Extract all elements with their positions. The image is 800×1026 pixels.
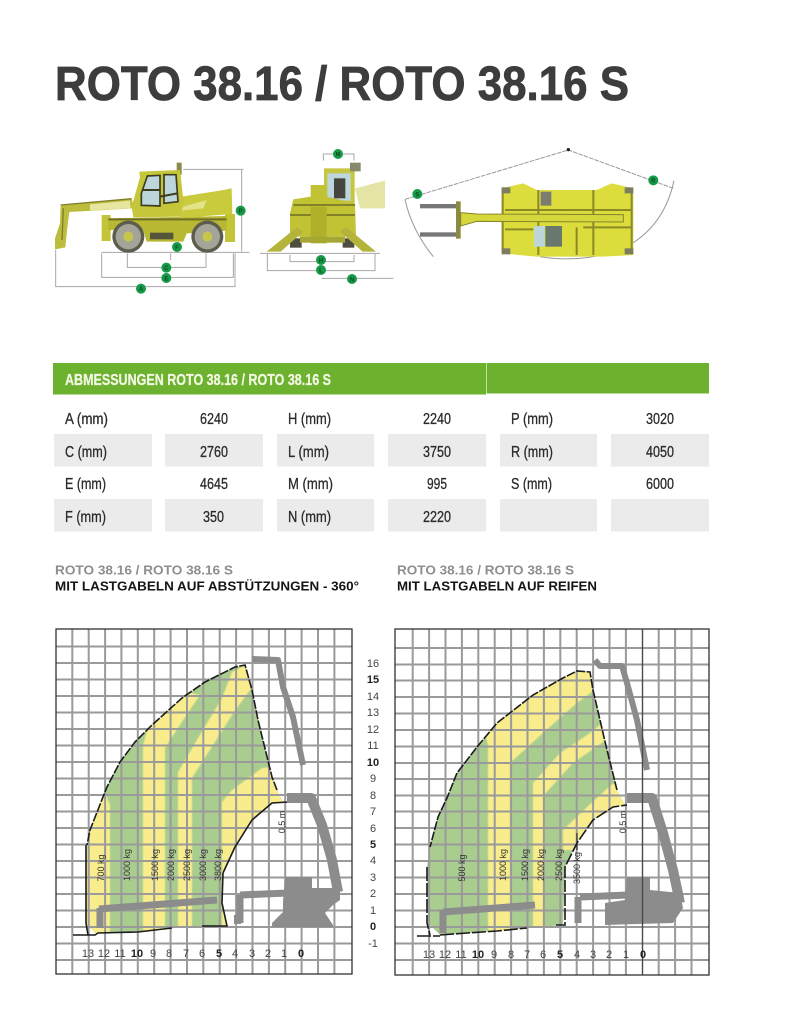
table values: 6240 xyxy=(200,411,228,428)
table values: 2240 xyxy=(423,411,451,428)
right chart x-axis numbers: 8 xyxy=(508,949,514,961)
axis: shared height scale: 10 xyxy=(367,757,379,769)
left chart x-axis numbers: 5 xyxy=(216,948,222,960)
left chart x-axis numbers: 1 xyxy=(281,948,287,960)
right chart load labels: 500 kg xyxy=(457,854,467,882)
heading: left load chart: MIT LASTGABELN AUF ABSTÜTZUNGEN - 360° xyxy=(55,578,359,594)
table column labels: S (mm) xyxy=(511,476,552,493)
title: ROTO 38.16 / ROTO 38.16 S xyxy=(55,58,629,111)
heading: left load chart xyxy=(55,564,359,594)
top view machine body xyxy=(502,183,633,257)
axis: shared height scale: 6 xyxy=(370,823,376,835)
heading: right load chart: ROTO 38.16 / ROTO 38.16 S xyxy=(397,564,574,578)
side view cab xyxy=(132,163,183,217)
left chart load labels: 3000 kg xyxy=(198,849,208,881)
left chart envelope line xyxy=(73,665,288,935)
right chart grid xyxy=(395,629,709,975)
axis: shared height scale: 5 xyxy=(370,839,376,851)
axis: shared height scale: 9 xyxy=(370,773,376,785)
axis: shared height scale: 8 xyxy=(370,790,376,802)
right chart load labels: 1000 kg xyxy=(498,849,508,881)
left chart load labels: 3800 kg xyxy=(213,849,223,881)
left chart load labels: 1500 kg xyxy=(150,849,160,881)
right chart x-axis numbers: 0 xyxy=(640,949,646,961)
axis: shared height scale: 7 xyxy=(370,806,376,818)
diagram: top view with swing radius xyxy=(405,148,674,259)
axis: shared height scale xyxy=(367,658,379,950)
right chart x-axis numbers: 2 xyxy=(606,949,612,961)
table values: 2760 xyxy=(200,444,228,461)
left chart x-axis numbers: 4 xyxy=(232,948,238,960)
axis: shared height scale: 0 xyxy=(370,921,376,933)
axis: shared height scale: 15 xyxy=(367,674,379,686)
front view labels xyxy=(316,149,357,284)
left chart load zones xyxy=(86,666,283,933)
front view body xyxy=(290,185,356,248)
axis: shared height scale: -1 xyxy=(368,938,378,950)
front view labels: N xyxy=(350,277,354,283)
table header band xyxy=(53,363,709,394)
axis: shared height scale: 4 xyxy=(370,855,376,867)
table column labels: A (mm) xyxy=(65,411,108,428)
side view labels: A xyxy=(139,287,144,293)
axis: shared height scale: 12 xyxy=(367,724,379,736)
left chart x-axis numbers: 13 xyxy=(82,948,94,960)
top view labels xyxy=(412,175,658,199)
left chart machine silhouette xyxy=(99,659,340,928)
table grey row cells xyxy=(54,434,709,532)
table values: 3020 xyxy=(646,411,674,428)
left chart x-axis numbers: 0 xyxy=(298,948,304,960)
right chart machine silhouette xyxy=(443,660,683,933)
top view forks xyxy=(420,201,461,239)
axis: shared height scale: 1 xyxy=(370,905,376,917)
top view labels: R xyxy=(651,179,656,185)
right chart x-axis numbers: 3 xyxy=(590,949,596,961)
right chart x-axis numbers: 4 xyxy=(574,949,580,961)
left chart load labels: 1000 kg xyxy=(122,849,132,881)
front view labels: M xyxy=(336,152,341,158)
heading: right load chart xyxy=(397,564,597,594)
right chart envelope line xyxy=(417,671,627,936)
right chart load labels: 2000 kg xyxy=(536,849,546,881)
heading: left load chart: ROTO 38.16 / ROTO 38.16 S xyxy=(55,564,233,578)
front view cab xyxy=(324,163,361,215)
top view labels: S xyxy=(415,192,419,198)
left chart x-axis numbers: 6 xyxy=(199,948,205,960)
axis: shared height scale: 13 xyxy=(367,707,379,719)
right chart x-axis numbers: 5 xyxy=(557,949,563,961)
right chart x-axis numbers: 6 xyxy=(540,949,546,961)
right chart x-axis numbers xyxy=(423,949,646,961)
axis: shared height scale: 2 xyxy=(370,888,376,900)
left chart x-axis numbers: 12 xyxy=(98,948,110,960)
right chart load labels: 1500 kg xyxy=(520,849,530,881)
side view wheels xyxy=(112,221,223,253)
front view dimension lines xyxy=(260,154,393,278)
front view labels: H xyxy=(319,258,323,264)
left chart load labels: 700 kg xyxy=(96,854,106,882)
front view raised boom xyxy=(355,181,385,208)
side view rear hood xyxy=(177,188,232,218)
left chart x-axis numbers: 9 xyxy=(150,948,156,960)
table values: 6000 xyxy=(646,476,674,493)
chart: load chart on stabilisers xyxy=(56,629,352,974)
left chart x-axis numbers: 11 xyxy=(114,948,126,960)
table column labels: N (mm) xyxy=(288,509,331,526)
right chart x-axis numbers: 1 xyxy=(623,949,629,961)
right chart vertical axis line xyxy=(642,629,644,975)
right chart marker line xyxy=(576,833,578,850)
left chart x-axis numbers: 7 xyxy=(183,948,189,960)
axis: shared height scale: 16 xyxy=(367,658,379,670)
top view swing radius lines xyxy=(405,148,674,259)
table column labels: F (mm) xyxy=(65,509,106,526)
diagram: side view with dimensions xyxy=(55,163,249,294)
left chart x-axis numbers: 3 xyxy=(249,948,255,960)
table values xyxy=(200,411,674,526)
side view labels: P xyxy=(239,209,243,215)
table values: 995 xyxy=(427,476,447,493)
left chart x-axis numbers: 10 xyxy=(131,948,143,960)
right chart load zones xyxy=(427,672,625,935)
left chart grid xyxy=(56,629,352,974)
left chart load labels: 2000 kg xyxy=(166,849,176,881)
front view stabilisers xyxy=(267,227,376,252)
right chart load labels: 2500 kg xyxy=(554,849,564,881)
table values: 4645 xyxy=(200,476,228,493)
left chart x-axis numbers xyxy=(82,948,304,960)
right chart x-axis numbers: 7 xyxy=(524,949,530,961)
side view labels xyxy=(136,206,246,294)
table column labels: H (mm) xyxy=(288,411,331,428)
side view labels: E xyxy=(164,276,168,282)
left chart x-axis numbers: 2 xyxy=(265,948,271,960)
table column labels: C (mm) xyxy=(65,444,107,461)
table column labels: E (mm) xyxy=(65,476,106,493)
table: dimensions xyxy=(53,363,709,532)
right chart x-axis numbers: 12 xyxy=(439,949,451,961)
left chart load labels: 0,5 m xyxy=(277,811,287,833)
right chart x-axis numbers: 13 xyxy=(423,949,435,961)
axis: shared height scale: 3 xyxy=(370,872,376,884)
diagram: front view with dimensions xyxy=(260,149,393,284)
table values: 3750 xyxy=(423,444,451,461)
axis: shared height scale: 14 xyxy=(367,691,379,703)
axis: shared height scale: 11 xyxy=(367,740,379,752)
table header band: ABMESSUNGEN ROTO 38.16 / ROTO 38.16 S xyxy=(65,372,331,389)
table column labels: P (mm) xyxy=(511,411,553,428)
right chart load labels: 0,5 m xyxy=(618,811,628,833)
left chart x-axis numbers: 8 xyxy=(166,948,172,960)
heading: right load chart: MIT LASTGABELN AUF REIFEN xyxy=(397,580,597,594)
side view chassis xyxy=(102,214,235,242)
front view labels: L xyxy=(319,268,323,274)
table values: 350 xyxy=(203,509,224,526)
left chart load labels xyxy=(96,811,287,882)
table values: 4050 xyxy=(646,444,674,461)
table column labels xyxy=(65,411,553,526)
right chart x-axis numbers: 10 xyxy=(472,949,484,961)
right chart load labels: 3500 kg xyxy=(572,852,582,884)
right chart x-axis numbers: 9 xyxy=(491,949,497,961)
top view boom xyxy=(461,213,623,226)
table column labels: R (mm) xyxy=(511,444,553,461)
side view labels: C xyxy=(164,266,169,272)
table column labels: L (mm) xyxy=(288,444,329,461)
table column labels: M (mm) xyxy=(288,476,333,493)
left chart load labels: 2500 kg xyxy=(182,849,192,881)
right chart load labels xyxy=(457,811,628,884)
table values: 2220 xyxy=(423,509,451,526)
chart: load chart on tyres xyxy=(395,629,709,975)
side view boom and forks xyxy=(55,199,134,249)
side view dimension lines xyxy=(56,169,249,287)
side view labels: F xyxy=(175,245,179,251)
right chart x-axis numbers: 11 xyxy=(455,949,467,961)
